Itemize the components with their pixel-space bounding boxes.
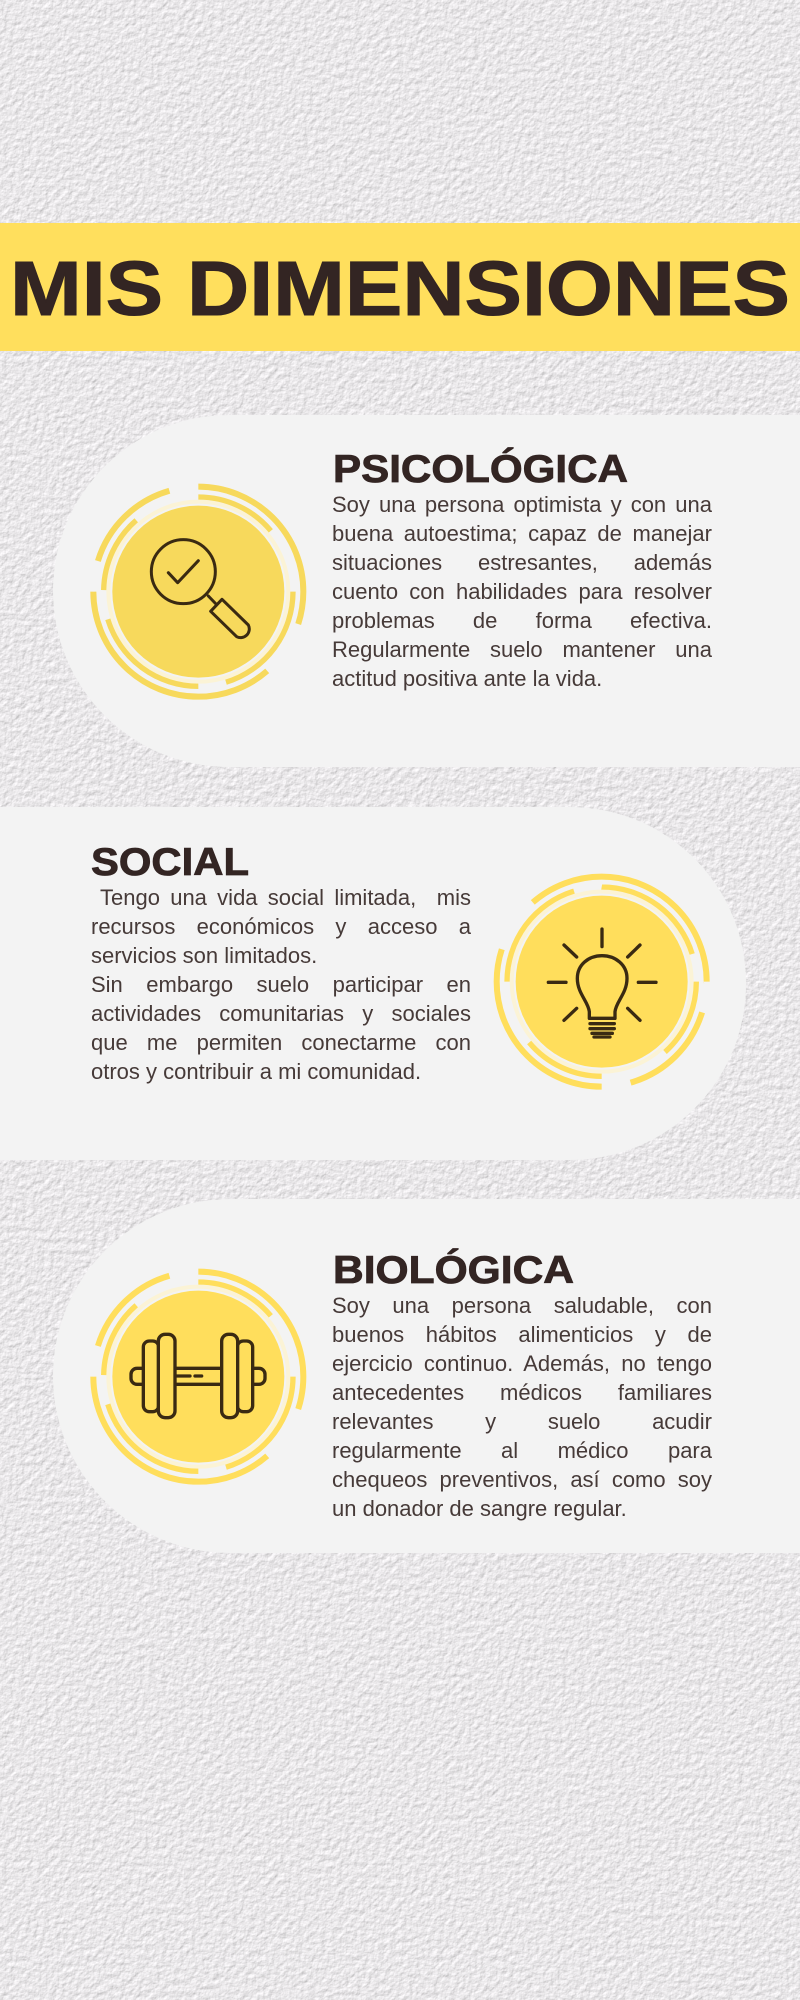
body text: ejercicio continuo. Además, no tengo xyxy=(332,1351,712,1376)
body text: buenos hábitos alimenticios y de xyxy=(332,1322,712,1347)
body text xyxy=(91,885,471,1084)
panel: biológica xyxy=(53,1199,800,1553)
body text: actividades comunitarias y sociales xyxy=(91,1001,471,1026)
body text: Regularmente suelo mantener una xyxy=(332,637,712,662)
icon: magnifying glass in yellow ring xyxy=(90,484,306,700)
heading: PSICOLÓGICA xyxy=(333,447,628,491)
body text: actitud positiva ante la vida. xyxy=(332,666,602,691)
body text: servicios son limitados. xyxy=(91,943,317,968)
body text: Tengo una vida social limitada, mis xyxy=(100,885,471,910)
body text: otros y contribuir a mi comunidad. xyxy=(91,1059,421,1084)
body text xyxy=(332,1293,712,1521)
body text: Soy una persona saludable, con xyxy=(332,1293,712,1318)
icon: light bulb in yellow ring xyxy=(494,874,710,1090)
body text: Sin embargo suelo participar en xyxy=(91,972,471,997)
panel: psicológica xyxy=(53,415,800,767)
body text xyxy=(332,492,712,691)
title: MIS DIMENSIONES xyxy=(10,246,790,332)
body text: relevantes y suelo acudir xyxy=(332,1409,712,1434)
icon: dumbbell in yellow ring xyxy=(90,1268,306,1485)
body text: antecedentes médicos familiares xyxy=(332,1380,712,1405)
body text: un donador de sangre regular. xyxy=(332,1496,627,1521)
body text: recursos económicos y acceso a xyxy=(91,914,471,939)
body text: situaciones estresantes, además xyxy=(332,550,712,575)
heading: BIOLÓGICA xyxy=(333,1248,574,1292)
body text: Soy una persona optimista y con una xyxy=(332,492,712,517)
body text: regularmente al médico para xyxy=(332,1438,712,1463)
body text: cuento con habilidades para resolver xyxy=(332,579,712,604)
title banner xyxy=(0,223,800,351)
body text: chequeos preventivos, así como soy xyxy=(332,1467,712,1492)
body text: que me permiten conectarme con xyxy=(91,1030,471,1055)
body text: buena autoestima; capaz de manejar xyxy=(332,521,712,546)
body text: problemas de forma efectiva. xyxy=(332,608,712,633)
panel: social xyxy=(0,807,746,1160)
heading: SOCIAL xyxy=(91,841,249,884)
